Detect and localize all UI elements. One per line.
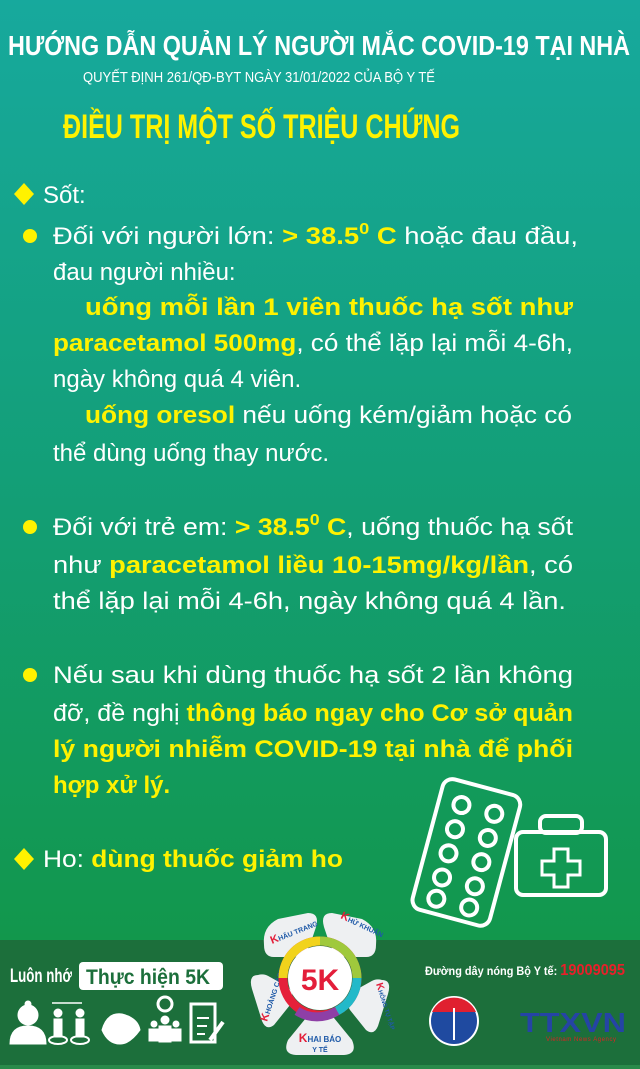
notice bullet — [23, 662, 573, 799]
children bullet — [23, 512, 573, 615]
footer: 5K icons — [10, 997, 223, 1044]
footer: 5K wheel: KHAI BÁO — [299, 1031, 341, 1045]
footer: 5K wheel — [251, 910, 399, 1055]
adults bullet — [23, 221, 578, 467]
heading: ĐIỀU TRỊ MỘT SỐ TRIỆU CHỨNG — [63, 107, 460, 146]
logo: ministry of health — [430, 997, 478, 1045]
icon: medical case — [516, 816, 606, 895]
footer — [0, 910, 640, 1069]
section: fever — [14, 182, 578, 799]
adults bullet: uống oresol nếu uống kém/giảm hoặc có — [85, 402, 572, 429]
notice bullet: hợp xử lý. — [53, 772, 170, 799]
footer: 5K wheel: KHOẢNG CÁCH — [258, 966, 287, 1023]
section: fever: Sốt: — [43, 182, 86, 209]
footer: 5K wheel: KHỬ KHUẨN — [339, 910, 386, 940]
footer: hotline: Đường dây nóng Bộ Y tế: 19009095 — [425, 962, 625, 979]
section: cough: Ho: dùng thuốc giảm ho — [43, 846, 343, 873]
adults bullet: uống mỗi lần 1 viên thuốc hạ sốt như — [85, 293, 574, 321]
footer: remember 5K: Luôn nhớ — [10, 966, 72, 987]
children bullet: 0 — [310, 512, 320, 529]
children bullet: Đối với trẻ em: > 38.5 — [53, 514, 302, 541]
adults bullet: paracetamol 500mg , có thể lặp lại mỗi 4-6h, — [53, 330, 573, 357]
notice bullet: lý người nhiễm COVID-19 tại nhà để phối — [53, 735, 573, 763]
logo: TTXVN: TTXVN — [520, 1007, 626, 1038]
logo: TTXVN: Vietnam News Agency — [546, 1037, 616, 1043]
adults bullet: đau người nhiều: — [53, 259, 236, 286]
footer: Thực hiện 5K — [86, 966, 210, 989]
footer: 5K wheel: 5K — [301, 964, 340, 997]
notice bullet: đỡ, đề nghị thông báo ngay cho Cơ sở quản — [53, 700, 573, 727]
adults bullet: Đối với người lớn: > 38.5 — [53, 223, 350, 250]
adults bullet: C — [369, 223, 397, 250]
children bullet: thể lặp lại mỗi 4-6h, ngày không quá 4 lần. — [53, 588, 566, 615]
children bullet: C — [320, 514, 346, 541]
footer: 5K wheel: KHẨU TRANG — [269, 917, 320, 947]
icon: pill blister — [410, 777, 522, 928]
children bullet: , uống thuốc hạ sốt — [346, 514, 550, 541]
icon: diamond — [14, 183, 34, 205]
subtitle: QUYẾT ĐỊNH 261/QĐ-BYT NGÀY 31/01/2022 CỦA BỘ Y TẾ — [83, 68, 435, 86]
notice bullet: Nếu sau khi dùng thuốc hạ sốt 2 lần không — [53, 662, 573, 689]
adults bullet: thể dùng uống thay nước. — [53, 440, 329, 467]
adults bullet: hoặc đau đầu, — [403, 223, 555, 250]
footer: 5K wheel: Y TẾ — [312, 1044, 328, 1054]
footer: 5K wheel: KHÔNG TỤ TẬP — [373, 982, 399, 1031]
children bullet: như paracetamol liều 10-15mg/kg/lần , có — [53, 552, 573, 579]
adults bullet: 0 — [359, 221, 369, 238]
adults bullet: ngày không quá 4 viên. — [53, 366, 301, 393]
